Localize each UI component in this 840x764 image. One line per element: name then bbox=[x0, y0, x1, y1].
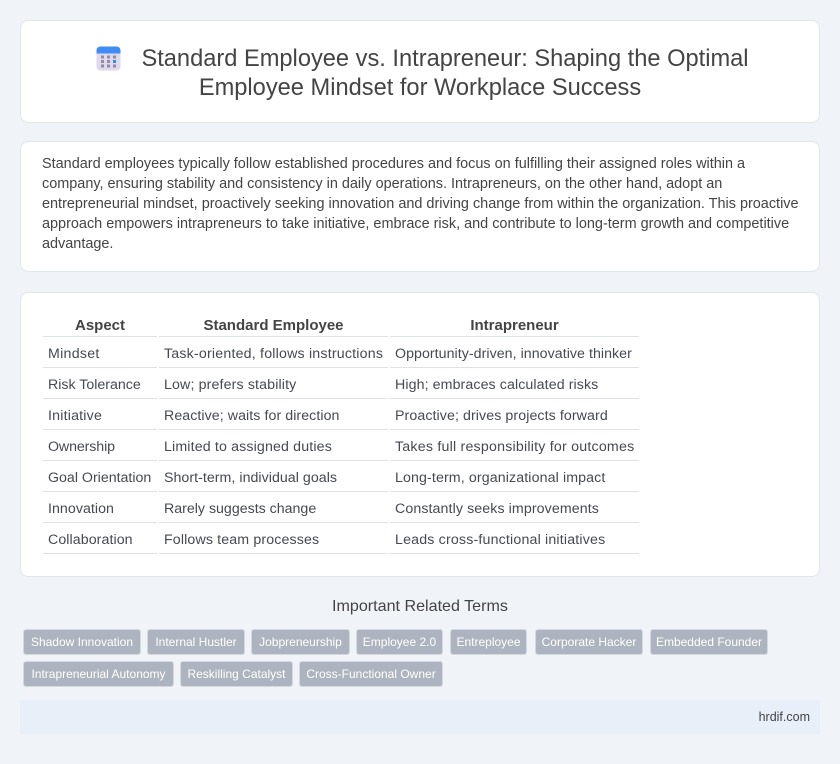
comparison table: Task-oriented, follows instructions bbox=[164, 346, 383, 362]
related term tags: Employee 2.0 bbox=[363, 635, 436, 649]
related term tags: Intrapreneurial Autonomy bbox=[31, 667, 166, 681]
comparison table: Innovation bbox=[48, 501, 114, 517]
related term tags: Reskilling Catalyst bbox=[187, 667, 286, 681]
comparison table: Follows team processes bbox=[164, 532, 319, 548]
intro paragraph: entrepreneurial mindset, proactively seeking innovation and driving change from within the organization. This proactive bbox=[42, 196, 799, 212]
comparison table: Short-term, individual goals bbox=[164, 470, 337, 486]
comparison table: Initiative bbox=[48, 408, 102, 424]
intro paragraph: Standard employees typically follow established procedures and focus on fulfilling their assigned roles within a bbox=[42, 156, 745, 172]
intro paragraph: approach empowers intrapreneurs to take initiative, embrace risk, and contribute to long-term growth and competitive bbox=[42, 216, 789, 232]
comparison table: Proactive; drives projects forward bbox=[395, 408, 608, 424]
comparison table: Long-term, organizational impact bbox=[395, 470, 605, 486]
intro paragraph: advantage. bbox=[42, 236, 113, 252]
comparison table: Leads cross-functional initiatives bbox=[395, 532, 605, 548]
comparison table: Rarely suggests change bbox=[164, 501, 316, 517]
related term tags: Embedded Founder bbox=[656, 635, 762, 649]
comparison table: Takes full responsibility for outcomes bbox=[395, 439, 634, 455]
related term tags: Jobpreneurship bbox=[259, 635, 342, 649]
icon: calendar bbox=[96, 46, 120, 70]
footer source: hrdif.com bbox=[759, 710, 810, 724]
panel: intro text card bbox=[20, 141, 820, 272]
related term tags bbox=[23, 629, 768, 687]
related term tags: Corporate Hacker bbox=[542, 635, 636, 649]
panel: comparison table card bbox=[20, 292, 820, 577]
comparison table: High; embraces calculated risks bbox=[395, 377, 598, 393]
comparison table: Constantly seeks improvements bbox=[395, 501, 599, 517]
related term tags: Cross-Functional Owner bbox=[306, 667, 436, 681]
heading: related terms: Important Related Terms bbox=[332, 597, 508, 615]
comparison table: Low; prefers stability bbox=[164, 377, 296, 393]
comparison table: Mindset bbox=[48, 346, 100, 362]
title: Standard Employee vs. Intrapreneur: Shaping the Optimal bbox=[141, 46, 749, 72]
panel: title card bbox=[20, 20, 820, 123]
comparison table: Collaboration bbox=[48, 532, 133, 548]
comparison table bbox=[43, 317, 639, 554]
comparison table: Reactive; waits for direction bbox=[164, 408, 340, 424]
intro paragraph: company, ensuring stability and consistency in daily operations. Intrapreneurs, on the other hand, adopt an bbox=[42, 176, 722, 192]
related term tags: Entreployee bbox=[456, 635, 521, 649]
intro paragraph bbox=[42, 156, 799, 252]
comparison table: Goal Orientation bbox=[48, 470, 151, 486]
comparison table: Aspect bbox=[75, 317, 125, 334]
related term tags: Shadow Innovation bbox=[31, 635, 133, 649]
footer bar bbox=[20, 700, 820, 734]
title: Employee Mindset for Workplace Success bbox=[199, 75, 641, 101]
comparison table: Intrapreneur bbox=[470, 317, 559, 334]
title bbox=[141, 46, 749, 101]
comparison table: Limited to assigned duties bbox=[164, 439, 332, 455]
comparison table: Ownership bbox=[48, 439, 115, 455]
related term tags: Internal Hustler bbox=[155, 635, 237, 649]
comparison table: Standard Employee bbox=[203, 317, 344, 334]
comparison table: Risk Tolerance bbox=[48, 377, 141, 393]
comparison table: Opportunity-driven, innovative thinker bbox=[395, 346, 632, 362]
